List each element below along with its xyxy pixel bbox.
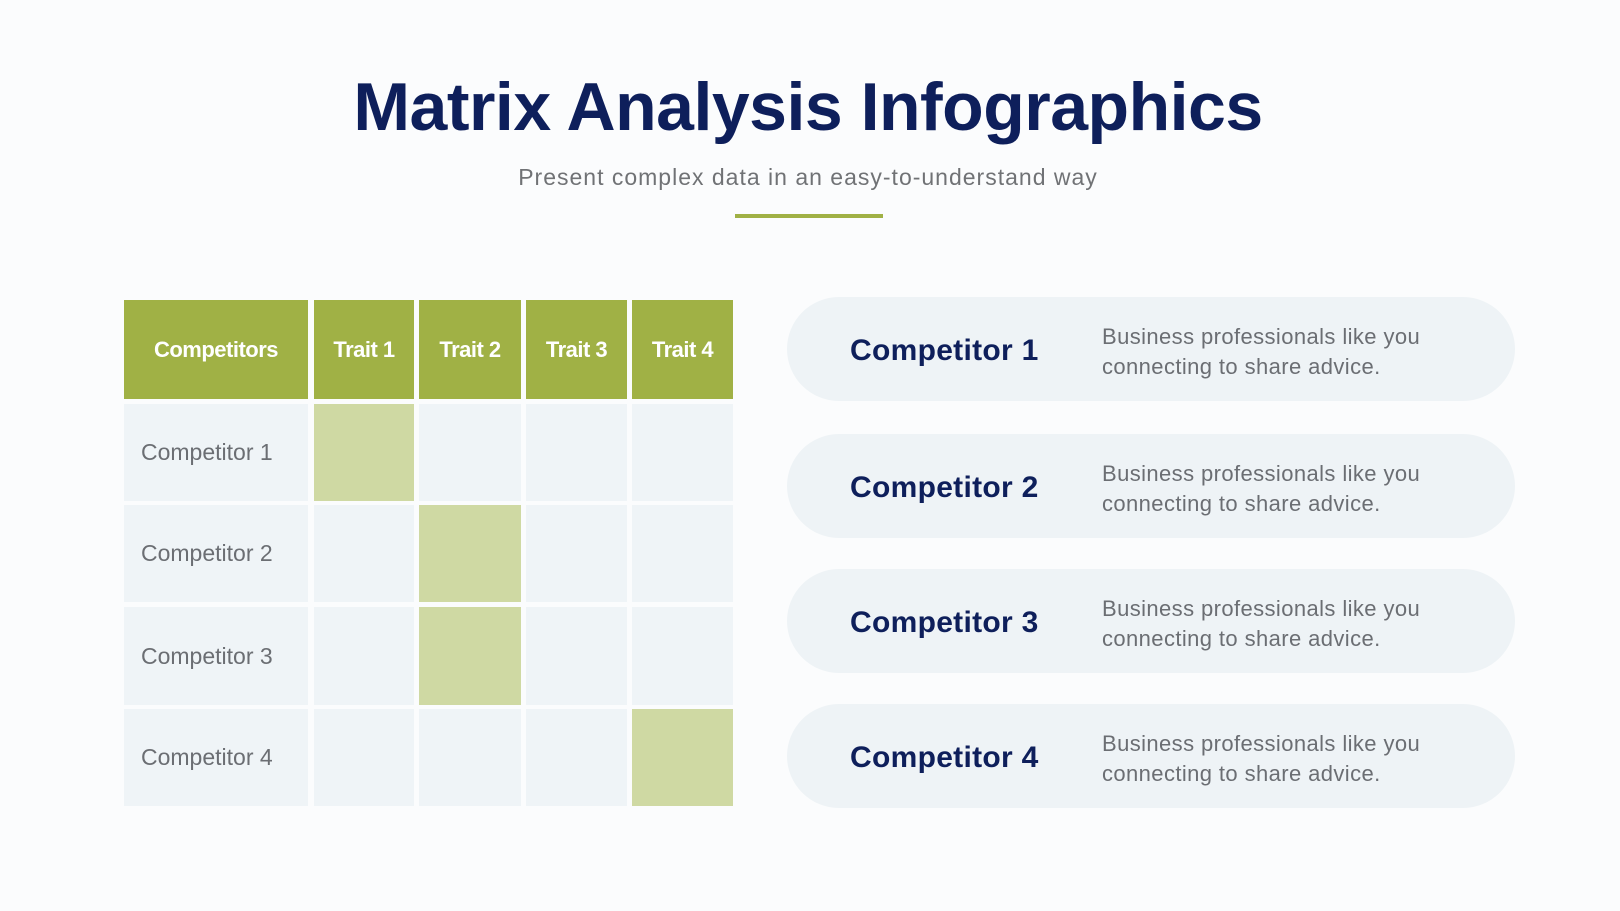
row label 4: Competitor 4 xyxy=(141,744,273,770)
pill: competitor 3: Business professionals like you xyxy=(1102,596,1420,621)
row label 4 xyxy=(124,709,308,806)
title: Matrix Analysis Infographics xyxy=(353,69,1263,145)
pill: competitor 3: connecting to share advice. xyxy=(1102,626,1381,651)
pill: competitor 1: Competitor 1 xyxy=(850,334,1039,367)
header: trait 1 xyxy=(314,300,414,399)
header: trait 2: Trait 2 xyxy=(439,336,501,362)
row label 1: Competitor 1 xyxy=(141,439,273,465)
pill: competitor 4 xyxy=(787,704,1515,808)
header: competitors xyxy=(124,300,308,399)
header: trait 4: Trait 4 xyxy=(652,336,713,362)
row label 1 xyxy=(124,404,308,501)
subtitle: Present complex data in an easy-to-understand way xyxy=(518,164,1098,190)
header: competitors: Competitors xyxy=(154,336,278,362)
pill: competitor 4: Business professionals like you xyxy=(1102,731,1420,756)
pill: competitor 4: Competitor 4 xyxy=(850,741,1039,774)
row label 2 xyxy=(124,505,308,602)
pill: competitor 4: connecting to share advice. xyxy=(1102,761,1381,786)
pill: competitor 2: Business professionals like you xyxy=(1102,461,1420,486)
header: trait 4 xyxy=(632,300,733,399)
header: trait 3 xyxy=(526,300,627,399)
pill: competitor 1: Business professionals like you xyxy=(1102,324,1420,349)
pill: competitor 2: connecting to share advice. xyxy=(1102,491,1381,516)
pill: competitor 2 xyxy=(787,434,1515,538)
pill: competitor 3 xyxy=(787,569,1515,673)
header: trait 2 xyxy=(419,300,521,399)
header: trait 3: Trait 3 xyxy=(546,336,607,362)
row label 2: Competitor 2 xyxy=(141,540,273,566)
header: trait 1: Trait 1 xyxy=(333,336,395,362)
pill: competitor 1 xyxy=(787,297,1515,401)
divider accent xyxy=(735,214,883,218)
row label 3: Competitor 3 xyxy=(141,642,273,668)
pill: competitor 1: connecting to share advice. xyxy=(1102,354,1381,379)
matrix table xyxy=(124,300,733,806)
pill: competitor 3: Competitor 3 xyxy=(850,606,1039,639)
pill: competitor 2: Competitor 2 xyxy=(850,471,1039,504)
row label 3 xyxy=(124,607,308,705)
